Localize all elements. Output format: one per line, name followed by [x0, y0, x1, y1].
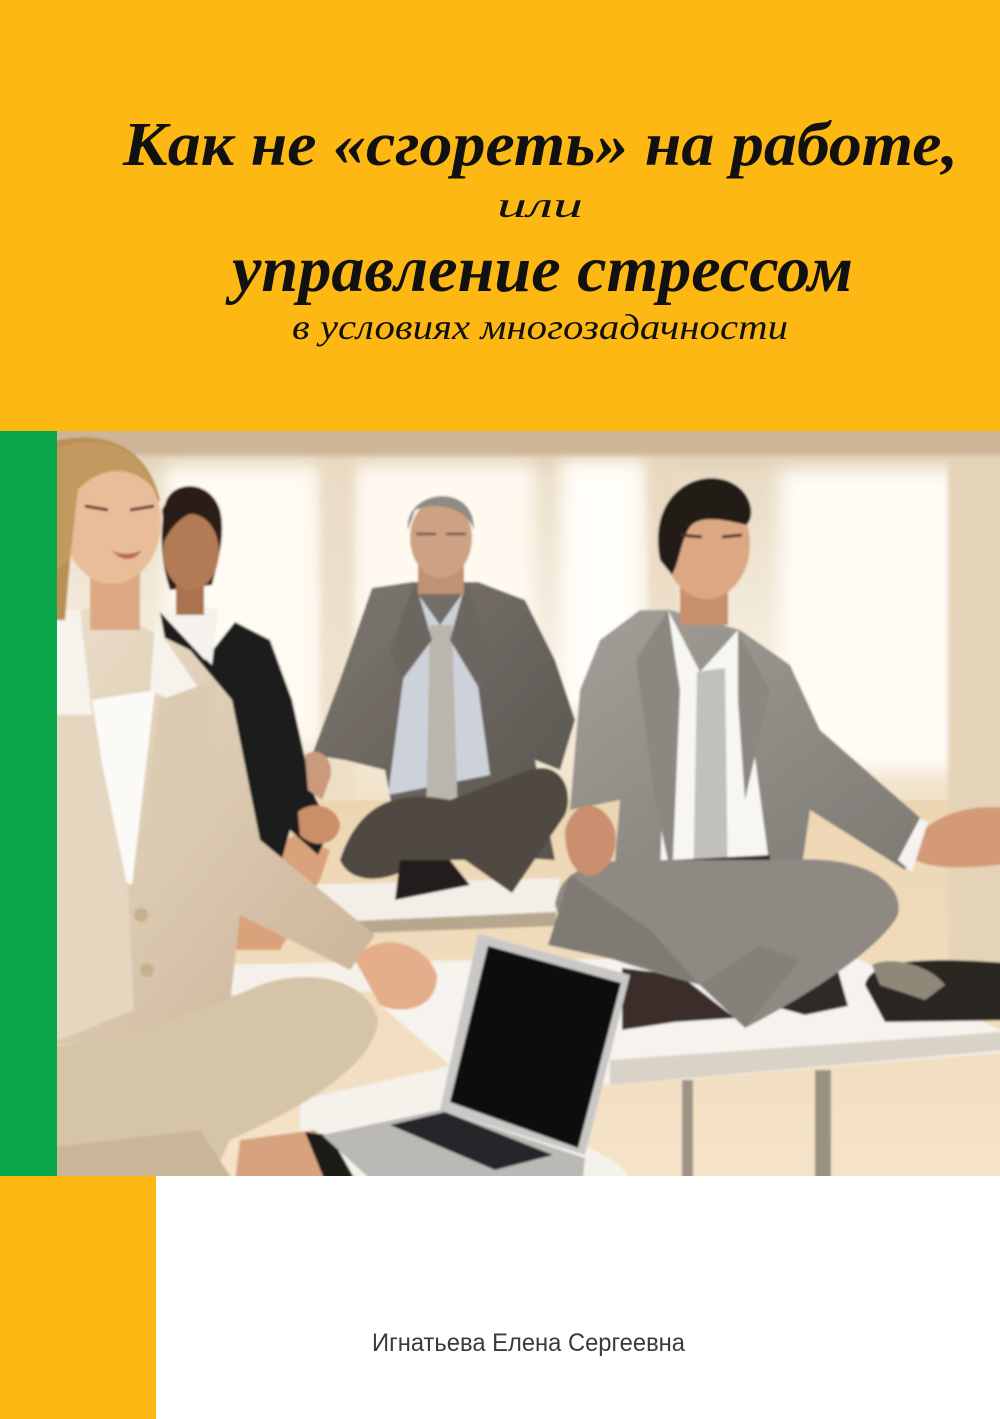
front table with legs — [300, 955, 1000, 1206]
laptop — [322, 934, 630, 1206]
person: older man in grey suit — [305, 496, 575, 900]
green vertical strip — [0, 431, 57, 1176]
subtitle: в условиях многозадачности — [292, 307, 788, 347]
bag on table — [865, 960, 1000, 1022]
title line 1: Как не «сгореть» на работе, — [122, 111, 958, 179]
title line 2: управление стрессом — [225, 233, 853, 306]
bottom left orange block — [0, 1176, 156, 1419]
title text block — [122, 111, 958, 347]
photo: meditating office workers — [30, 410, 1000, 1206]
back tables — [215, 878, 560, 995]
person: woman in black jacket — [160, 486, 340, 950]
connector word: или — [497, 185, 583, 225]
person: young man in grey suit — [548, 478, 1000, 1030]
top orange title panel — [0, 0, 1000, 431]
author name: Игнатьева Елена Сергеевна — [372, 1329, 685, 1357]
room background — [30, 410, 1000, 1206]
person: blonde woman in beige suit — [30, 437, 437, 1206]
